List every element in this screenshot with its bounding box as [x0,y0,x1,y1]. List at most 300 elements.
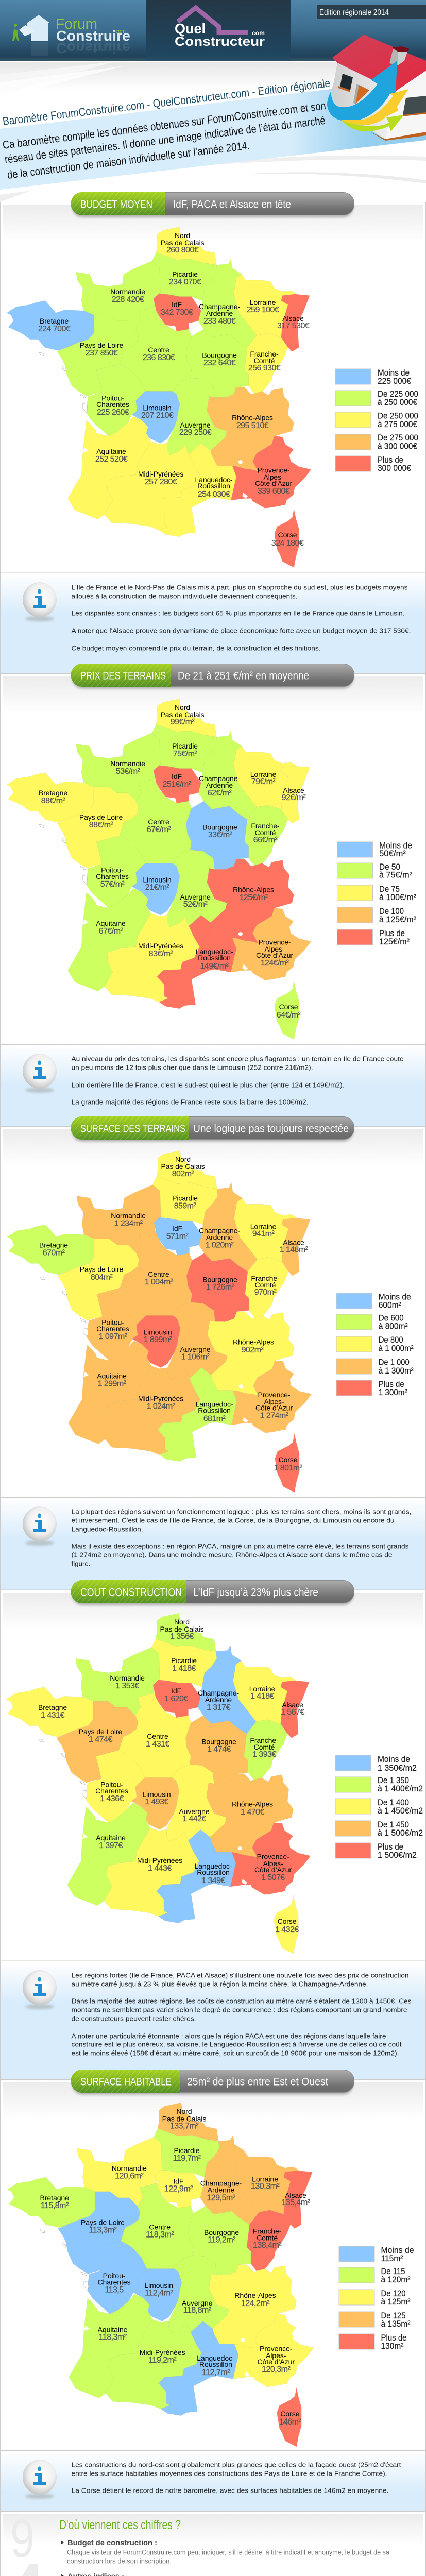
region labels: 92€/m² [282,793,306,802]
legend: prix terrains [337,841,416,946]
legend: surface habitable: Plus de [381,2333,407,2343]
region labels: 1 493€ [145,1798,168,1806]
logo: ForumConstruire: Construire [56,40,130,56]
icon: puzzle house [27,15,49,41]
region labels [39,703,306,1020]
region labels: Limousin [143,404,172,412]
map: prix des terrains [7,699,311,1039]
region labels: 119,2m² [148,2355,177,2365]
legend: cout construction: De 1 450 [378,1820,409,1829]
legend: cout construction: à 1 500€/m2 [378,1828,423,1838]
legend: prix terrains: à 100€/m² [379,892,416,902]
legend: surface terrains: 600m² [379,1300,401,1310]
legend: cout construction: De 1 400 [378,1798,409,1807]
region labels: Bourgogne [201,1737,236,1745]
region labels: Alsace [285,2191,306,2199]
region labels: Bretagne [39,1241,68,1249]
region labels: Nord [174,1618,190,1626]
region labels: 83€/m² [149,950,173,958]
region labels: Midi-Pyrénées [140,2348,185,2357]
region labels: Aquitaine [96,447,126,455]
region labels: Rhône-Alpes [233,1338,274,1346]
region labels: Languedoc- [196,947,233,956]
region labels: 295 510€ [236,421,269,430]
region labels: 118,8m² [183,2306,212,2315]
region labels: Champagne- [199,302,240,311]
header band [0,0,426,62]
heading: prix des terrains: PRIX DES TERRAINS [80,670,166,682]
region labels: 1 024m² [147,1402,176,1411]
legend: prix terrains: à 75€/m² [379,870,412,880]
region labels: 1 234m² [114,1218,143,1228]
region labels: Corse [278,531,297,539]
region labels: Midi-Pyrénées [138,470,183,478]
background numerals [12,2526,38,2576]
region labels: 112,7m² [202,2368,230,2377]
region labels: 99€/m² [171,718,195,726]
heading: cout construction [71,1580,354,1605]
region labels: Comté [255,1281,276,1289]
region labels: Midi-Pyrénées [138,942,183,950]
legend: prix terrains: 125€/m² [379,937,410,946]
heading: surface des terrains: Une logique pas toujours respectée [193,1123,349,1135]
region labels: Normandie [110,287,145,296]
region labels: Roussillon [197,482,230,490]
region labels: Pays de Loire [79,813,123,821]
region labels: 1 432€ [275,1925,299,1934]
region labels: 254 030€ [198,490,230,499]
region labels: 113,5 [105,2285,124,2295]
region labels: 1 443€ [148,1864,172,1873]
heading: prix des terrains [71,664,354,689]
region labels: Charentes [97,2278,131,2286]
region labels: Pas de Calais [160,239,205,247]
region labels: IdF [172,300,182,309]
region labels: Picardie [172,1194,198,1202]
region labels [38,231,310,548]
region labels: 237 850€ [86,349,118,358]
region labels: Aquitaine [96,919,126,927]
region labels: Auvergne [180,421,211,429]
region labels: 342 730€ [161,308,193,317]
region labels: Nord [175,231,190,240]
legend: surface terrains: à 1 000m² [379,1344,414,1353]
region labels: 970m² [254,1287,277,1297]
region labels: 138,4m² [253,2241,282,2250]
region labels: 115,8m² [41,2201,69,2210]
logo: ForumConstruire: Construire [56,28,130,44]
panel: cout construction map [0,1580,425,1961]
region labels: Bourgogne [204,2228,239,2236]
legend: prix terrains: à 125€/m² [379,914,416,924]
region labels: 1 567€ [281,1708,304,1717]
region labels: 681m² [203,1414,226,1423]
legend: cout construction: à 1 400€/m2 [378,1784,423,1793]
region labels: Aquitaine [98,2325,128,2333]
region labels: Corse [278,1917,297,1925]
region labels: Limousin [144,2281,173,2290]
info text [71,1971,412,2057]
region labels: Franche- [250,1736,279,1744]
regions [7,227,311,567]
region labels: Côte d’Azur [255,1404,293,1412]
logo: ForumConstruire [12,15,130,56]
edition tag: Edition régionale 2014 [319,8,389,17]
region labels: 125€/m² [240,893,268,902]
legend: budget: 300 000€ [378,463,411,473]
legend: surface habitable: De 125 [381,2311,406,2320]
info text: Les constructions du nord-est sont globalement plus grandes que celles de la façade ouest (25m2 d'écart [71,2461,401,2469]
region labels: 224 700€ [38,325,71,333]
region labels: 118,3m² [146,2230,174,2240]
banner paragraph [2,99,327,181]
region labels: Roussillon [198,1406,231,1415]
region labels: Franche- [251,822,280,830]
region labels: Alpes- [266,2351,286,2360]
region labels: Poitou- [101,1318,124,1327]
icon: house with arrows [327,35,426,141]
region labels: 324 180€ [271,539,304,548]
legend: surface habitable: à 125m² [381,2297,411,2307]
region labels: Franche- [253,2227,282,2235]
legend: cout construction: Moins de [378,1754,410,1764]
info text: au mètre carré jusqu'à 23 % plus élevés que la région la moins chère, la Champagne-Ardenne. [71,1980,368,1988]
regions [7,2103,314,2447]
region labels: 902m² [242,1345,264,1354]
region labels: Rhône-Alpes [233,885,274,893]
icon: info [23,1970,57,2009]
icon: purple house outline [178,8,248,32]
region labels: Champagne- [200,2179,242,2188]
info text: Loin derrière l'Ile de France, c'est le sud-est qui est le plus cher (entre 124 et 149€/m2). [71,1081,344,1089]
region labels: 670m² [43,1248,65,1258]
logo: QuelConstructeur [146,0,291,61]
map: surface habitable [7,2103,314,2447]
heading: surface des terrains: SURFACE DES TERRAINS [80,1123,185,1135]
panel: info surface habitable [0,2450,425,2511]
icon: info [23,1506,57,1546]
region labels: Picardie [174,2146,200,2155]
legend: budget: De 275 000 [378,433,418,443]
region labels: 120,3m² [262,2365,291,2374]
region labels: Champagne- [199,1226,240,1234]
info text: (1 274m2 en moyenne). Dans une moindre mesure, Rhône-Alpes et Alsace sont dans le même cas de [71,1551,393,1559]
region labels: 257 280€ [145,478,177,486]
legend: prix terrains: Plus de [379,928,405,938]
heading: sources: D'où viennent ces chiffres ? [59,2518,181,2532]
region labels: IdF [172,1224,182,1232]
region labels: Roussillon [198,954,231,962]
legend: budget: Plus de [378,455,403,465]
legend: cout construction: à 1 450€/m2 [378,1806,423,1816]
region labels: Ardenne [208,2186,235,2194]
region labels: Lorraine [250,298,276,307]
region labels: Auvergne [180,893,211,901]
legend: budget: 225 000€ [378,376,411,386]
legend: surface habitable: 130m² [381,2341,404,2351]
region labels: 1 356€ [170,1632,194,1641]
region labels: Bretagne [38,1703,67,1711]
region labels: 1 349€ [201,1876,225,1885]
legend: surface terrains: Plus de [379,1379,404,1389]
region labels: 1 418€ [250,1692,274,1701]
legend: surface habitable: à 120m² [381,2275,411,2284]
region labels: Limousin [143,876,172,884]
banner paragraph: Ca baromètre compile les données obtenues sur ForumConstruire.com et son [2,99,327,151]
panel: sources [0,2509,425,2576]
heading: cout construction: COUT CONSTRUCTION [80,1587,182,1599]
region labels: 79€/m² [251,777,276,786]
info text: A noter que l'Alsace prouve son dynamisme de place économique forte avec un budget moyen de 317 530€. [71,626,411,635]
info text: La Corse détient le record de notre baromètre, avec des surfaces habitables de 146m2 en moyenne. [71,2486,388,2495]
region labels: 1 397€ [99,1841,123,1850]
region labels: Auvergne [179,1807,210,1816]
region labels: 859m² [174,1201,196,1210]
banner paragraph: réseau de sites partenaires. Il donne une image indicative de l’état du marché [4,114,326,166]
heading: budget moyen [71,192,354,217]
heading: surface habitable: SURFACE HABITABLE [80,2076,172,2088]
block: budget de construction: Budget de construction : [67,2538,157,2547]
region labels: Pas de Calais [160,710,205,719]
region labels: Alpes- [264,945,285,953]
banner title: Baromètre ForumConstruire.com - QuelConstructeur.com - Edition régionale [2,76,331,128]
region labels: Côte d’Azur [254,1866,292,1874]
panel: surface habitable map [0,2070,425,2450]
region labels: 1 148m² [280,1245,309,1255]
region labels: 130,3m² [251,2182,280,2191]
region labels: 33€/m² [208,831,232,839]
region labels: 1 393€ [252,1750,276,1759]
legend: budget: à 275 000€ [378,419,417,429]
region labels: 260 800€ [166,246,199,255]
legend: surface habitable: De 120 [381,2289,406,2298]
region labels: 146m² [279,2417,302,2427]
heading: cout construction: L’IdF jusqu’à 23% plus chère [193,1587,318,1599]
region labels: 1 431€ [41,1711,64,1720]
region labels: Poitou- [103,2272,126,2280]
region labels: 1 106m² [181,1352,210,1361]
region labels: Picardie [172,270,198,278]
logo: ForumConstruire: com [115,29,126,35]
region labels: Normandie [111,1211,146,1219]
region labels: 119,7m² [173,2154,201,2163]
legend: budget [335,368,418,473]
region labels: Auvergne [180,1345,211,1353]
region labels: Comté [255,828,276,837]
region labels: 75€/m² [173,750,197,758]
region labels: Nord [175,1155,191,1163]
region labels: Centre [148,818,169,826]
region labels: Provence- [258,466,290,474]
legend: budget: à 300 000€ [378,441,417,451]
region labels: 228 420€ [112,295,144,304]
region labels: Côte d’Azur [257,2358,295,2366]
region labels: Pays de Loire [79,1727,122,1736]
region labels [38,1618,304,1934]
legend: budget: De 225 000 [378,389,418,399]
region labels: 122,9m² [164,2184,193,2194]
region labels: Charentes [96,1325,129,1333]
legend: prix terrains: Moins de [379,841,412,850]
region labels: Provence- [258,1391,291,1399]
region labels: Provence- [259,938,291,946]
region labels: Roussillon [199,2360,232,2368]
region labels: IdF [172,772,182,781]
info text: montants ne semblent pas varier selon le degré de concurrence : des régions comportant un grand nombre [71,2006,407,2013]
panel: info terrains [0,1045,425,1126]
region labels: Languedoc- [195,1862,232,1870]
region labels: 1 097m² [99,1332,128,1341]
region labels: Franche- [250,350,279,358]
legend: surface habitable: Moins de [381,2245,414,2255]
map: cout construction [6,1613,311,1954]
region labels: Champagne- [198,1689,239,1697]
region labels: 1 353€ [115,1682,139,1690]
info text [71,1055,404,1106]
regions [7,699,311,1039]
region labels: 88€/m² [89,821,113,829]
banner paragraph: de la construction de maison individuelle sur l’année 2014. [7,139,250,181]
info text: un peu moins de 12 fois plus cher que dans le Limousin (252 contre 21€/m2). [71,1063,313,1072]
region labels: Auvergne [182,2299,213,2307]
region labels: Centre [149,2223,171,2231]
region labels: 21€/m² [145,883,169,892]
region labels: 941m² [252,1229,275,1239]
region labels: 1 474€ [207,1745,231,1754]
region labels: Lorraine [249,1685,276,1693]
region labels: 113,3m² [89,2225,117,2235]
region labels: Côte d’Azur [256,951,293,959]
region labels: 1 507€ [261,1873,285,1882]
region labels: Limousin [142,1790,171,1798]
region labels: 1 801m² [274,1463,303,1472]
region labels: 112,4m² [145,2289,173,2298]
region labels: Ardenne [205,1696,232,1704]
legend: prix terrains: De 75 [379,884,400,894]
region labels: Charentes [96,872,129,880]
region labels: 252 520€ [95,455,128,464]
region labels: 251€/m² [163,780,192,789]
info text: Les disparités sont criantes : les budgets sont 65 % plus importants en Ile de France que dans le Limousin. [71,609,405,617]
region labels: 1 436€ [100,1794,124,1803]
region labels: Poitou- [101,866,124,874]
region labels: Côte d’Azur [255,479,292,487]
region labels: 1 020m² [206,1241,234,1250]
region labels: 317 530€ [277,321,310,330]
panel: info surface terrains [0,1497,425,1590]
legend: surface habitable [339,2245,414,2351]
icon: info [23,2460,57,2499]
region labels: Comté [254,357,275,365]
info text: est le moins élevé (158€ d'écart au mètre carré, soit un surcoût de 18 900€ pour une maison de 120m2). [71,2049,399,2057]
info text: Mais il existe des exceptions : en région PACA, malgré un prix au mètre carré élevé, les terrains sont grands [71,1543,409,1550]
region labels: 120,6m² [115,2171,144,2180]
region labels: Charentes [95,1787,128,1795]
info text [71,1507,411,1567]
info text: Ce budget moyen comprend le prix du terrain, de la construction et des finitions. [71,644,320,652]
info text: figure. [71,1560,91,1567]
region labels: Ardenne [206,309,233,317]
region labels: 64€/m² [277,1011,301,1020]
region labels: Bretagne [40,2194,69,2202]
region labels: 1 620€ [164,1694,188,1703]
region labels: Lorraine [250,1222,277,1230]
region labels: Midi-Pyrénées [137,1856,182,1865]
region labels: Pas de Calais [161,1162,205,1171]
region labels: Charentes [96,400,129,409]
region labels: Normandie [110,759,145,768]
region labels: Languedoc- [197,2354,235,2362]
map: budget moyen [7,227,311,567]
region labels: 1 004m² [145,1277,174,1286]
region labels: Nord [175,703,190,711]
region labels: Bretagne [39,789,67,797]
region labels: Roussillon [197,1868,230,1876]
legend: budget: à 250 000€ [378,397,417,407]
region labels: 88€/m² [41,796,65,805]
region labels: 1 317€ [207,1703,230,1712]
info text: L'Ile de France et le Nord-Pas de Calais mis à part, plus on s'approche du sud est, plus les budgets moyens [71,583,408,591]
panel: info cout construction [0,1961,425,2079]
region labels: Corse [279,1003,298,1011]
icon: info [23,582,57,621]
heading: surface habitable: 25m² de plus entre Est et Ouest [187,2076,328,2088]
region labels: 67€/m² [147,825,171,834]
legend: surface habitable: De 115 [381,2266,405,2276]
region labels: 124€/m² [261,959,289,968]
region labels: Corse [280,2410,300,2418]
panel: prix des terrains map [0,664,425,1044]
info text: de constructeurs peuvent rester chères. [71,2014,196,2023]
legend: surface terrains: 1 300m² [379,1387,407,1397]
region labels: 1 899m² [144,1335,173,1344]
map: surface des terrains [7,1150,312,1493]
region labels: Alpes- [263,1859,283,1868]
legend: surface terrains: à 1 300m² [379,1366,414,1376]
icon: info [23,1054,57,1093]
info text: alloués à la construction de maison individuelle deviennent conséquents. [71,592,298,600]
region labels: Alsace [282,314,304,323]
region labels: 1 431€ [146,1740,169,1749]
legend: cout construction: Plus de [378,1842,403,1852]
legend: prix terrains: 50€/m² [379,849,406,858]
legend: surface habitable: 115m² [381,2253,403,2263]
intro banner [0,35,426,202]
region labels: Pays de Loire [81,2218,125,2226]
region labels: Rhône-Alpes [234,2291,276,2299]
region labels: Pas de Calais [162,2114,206,2123]
region labels: Franche- [251,1274,280,1282]
block: autres indices [61,2572,376,2576]
regions [7,1150,312,1493]
region labels: Alsace [282,1701,303,1709]
region labels: Poitou- [101,394,124,402]
region labels: 225 260€ [97,408,129,417]
region labels: Centre [148,346,169,354]
region labels: Alsace [283,1239,304,1247]
region labels: IdF [171,1687,181,1695]
block: budget de construction [61,2538,389,2565]
region labels: 233 480€ [203,317,236,326]
region labels: 53€/m² [116,767,140,776]
region labels: 66€/m² [253,836,278,844]
region labels: Centre [147,1732,168,1740]
legend: surface terrains: à 800m² [379,1321,408,1331]
region labels: Poitou- [100,1781,123,1789]
regions [6,1613,311,1954]
region labels: Bretagne [40,317,69,325]
region labels: Midi-Pyrénées [138,1395,183,1403]
